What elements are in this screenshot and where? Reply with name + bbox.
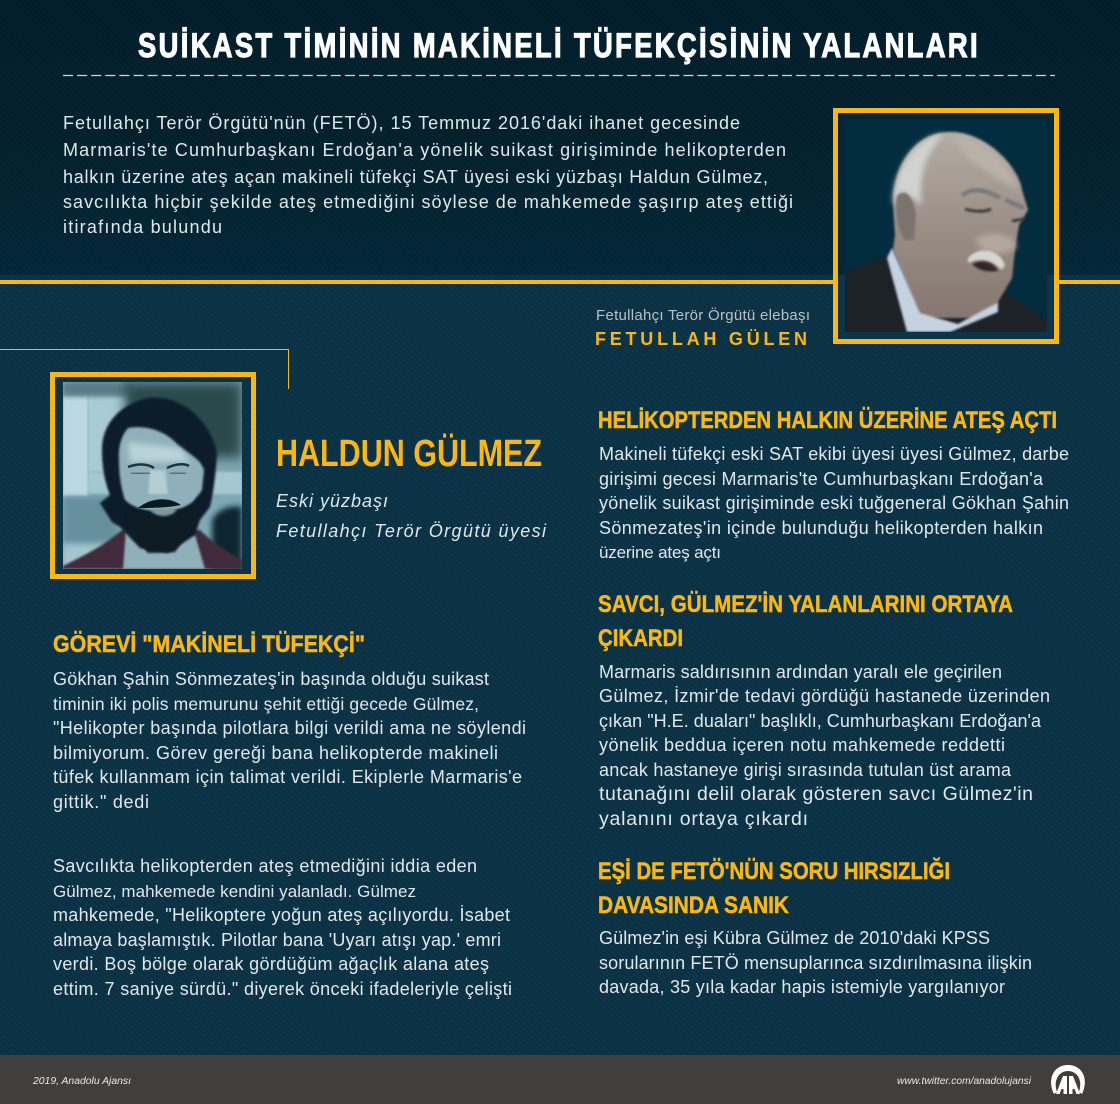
intro text: Marmaris'te Cumhurbaşkanı Erdoğan'a yönelik suikast girişiminde helikopterden	[63, 140, 786, 160]
section: savcı: Marmaris saldırısının ardından yaralı ele geçirilen	[599, 662, 1002, 682]
section: eşi: EŞİ DE FETÖ'NÜN SORU HIRSIZLIĞI	[598, 857, 950, 885]
icon: AA logo	[1051, 1065, 1085, 1094]
footer	[0, 1055, 1120, 1104]
section: görevi: gittik." dedi	[53, 792, 149, 812]
portrait: Fetullah Gülen	[833, 108, 1059, 344]
section: helikopterden: girişimi gecesi Marmaris'te Cumhurbaşkanı Erdoğan'a	[599, 469, 1044, 489]
section: savcılıkta: verdi. Boş bölge olarak gördüğüm ağaçlık alana ateş	[53, 954, 489, 974]
section: savcılıkta: Savcılıkta helikopterden ateş etmediğini iddia eden	[53, 856, 477, 876]
section: savcı: Gülmez, İzmir'de tedavi gördüğü hastanede üzerinden	[599, 686, 1050, 706]
intro text: itirafında bulundu	[63, 217, 222, 237]
section: görevi: Gökhan Şahin Sönmezateş'in başında olduğu suikast	[53, 669, 489, 689]
section: savcı: yalanını ortaya çıkardı	[599, 808, 808, 830]
section: görevi: tüfek kullanmam için talimat verildi. Ekiplerle Marmaris'e	[53, 767, 522, 787]
section: savcı: ÇIKARDI	[598, 625, 683, 652]
section: savcı: çıkan "H.E. duaları" başlıklı, Cumhurbaşkanı Erdoğan'a	[599, 711, 1042, 731]
section: savcı	[598, 591, 1050, 830]
section: görevi: bilmiyorum. Görev gereği bana helikopterde makineli	[53, 743, 498, 763]
section: görevi	[53, 631, 526, 812]
section: savcılıkta: ettim. 7 saniye sürdü." diyerek önceki ifadeleriyle çelişti	[53, 979, 512, 999]
section: savcı: yönelik beddua içeren notu mahkemede reddetti	[599, 735, 1005, 755]
section: savcı: tutanağını delil olarak gösteren savcı Gülmez'in	[599, 783, 1033, 805]
name block	[276, 432, 547, 541]
section: eşi: DAVASINDA SANIK	[598, 892, 790, 919]
intro text	[63, 113, 793, 237]
section: helikopterden: Sönmezateş'in içinde bulunduğu helikopterden halkın	[599, 518, 1043, 538]
caption: Fetullah Gülen	[595, 306, 810, 349]
section: savcılıkta: mahkemede, "Helikoptere yoğun ateş açılıyordu. İsabet	[53, 905, 510, 925]
portrait: Haldun Gülmez	[52, 374, 254, 576]
section: savcılıkta	[53, 856, 512, 999]
section: helikopterden: yönelik suikast girişiminde eski tuğgeneral Gökhan Şahin	[599, 493, 1069, 513]
intro text: halkın üzerine ateş açan makineli tüfekçi SAT üyesi eski yüzbaşı Haldun Gülmez,	[63, 167, 768, 187]
intro text: savcılıkta hiçbir şekilde ateş etmediğini söylese de mahkemede şaşırıp ateş ettiği	[63, 192, 793, 212]
caption: Fetullah Gülen: FETULLAH GÜLEN	[595, 329, 807, 349]
name block: Eski yüzbaşı	[276, 491, 388, 511]
footer: 2019, Anadolu Ajansı	[32, 1076, 131, 1087]
section: eşi: sorularının FETÖ mensuplarınca sızdırılmasına ilişkin	[599, 953, 1032, 973]
footer: www.twitter.com/anadolujansi	[897, 1076, 1032, 1087]
section: savcılıkta: Gülmez, mahkemede kendini yalanladı. Gülmez	[53, 882, 416, 901]
yellow divider	[0, 280, 1120, 284]
section: savcı: ancak hastaneye girişi sırasında tutulan üst arama	[599, 760, 1012, 780]
section: eşi	[598, 857, 1032, 997]
section: savcı: SAVCI, GÜLMEZ'İN YALANLARINI ORTAYA	[598, 591, 1013, 618]
section: eşi: davada, 35 yıla kadar hapis istemiyle yargılanıyor	[599, 977, 1005, 997]
name block: HALDUN GÜLMEZ	[276, 432, 542, 475]
section: helikopterden: üzerine ateş açtı	[599, 543, 721, 562]
section: helikopterden: Makineli tüfekçi eski SAT ekibi üyesi üyesi Gülmez, darbe	[599, 444, 1069, 464]
section: görevi: GÖREVİ "MAKİNELİ TÜFEKÇİ"	[53, 631, 365, 658]
section: görevi: timinin iki polis memurunu şehit ettiği gecede Gülmez,	[53, 694, 479, 714]
section: eşi: Gülmez'in eşi Kübra Gülmez de 2010'daki KPSS	[599, 928, 990, 948]
intro text: Fetullahçı Terör Örgütü'nün (FETÖ), 15 Temmuz 2016'daki ihanet gecesinde	[63, 113, 740, 133]
caption: Fetullah Gülen: Fetullahçı Terör Örgütü elebaşı	[596, 306, 810, 324]
section: savcılıkta: almaya başlamıştık. Pilotlar bana 'Uyarı atışı yap.' emri	[53, 930, 501, 950]
name block: Fetullahçı Terör Örgütü üyesi	[276, 521, 547, 541]
section: görevi: "Helikopter başında pilotlara bilgi verildi ama ne söylendi	[53, 718, 526, 738]
section: helikopterden	[598, 407, 1069, 562]
